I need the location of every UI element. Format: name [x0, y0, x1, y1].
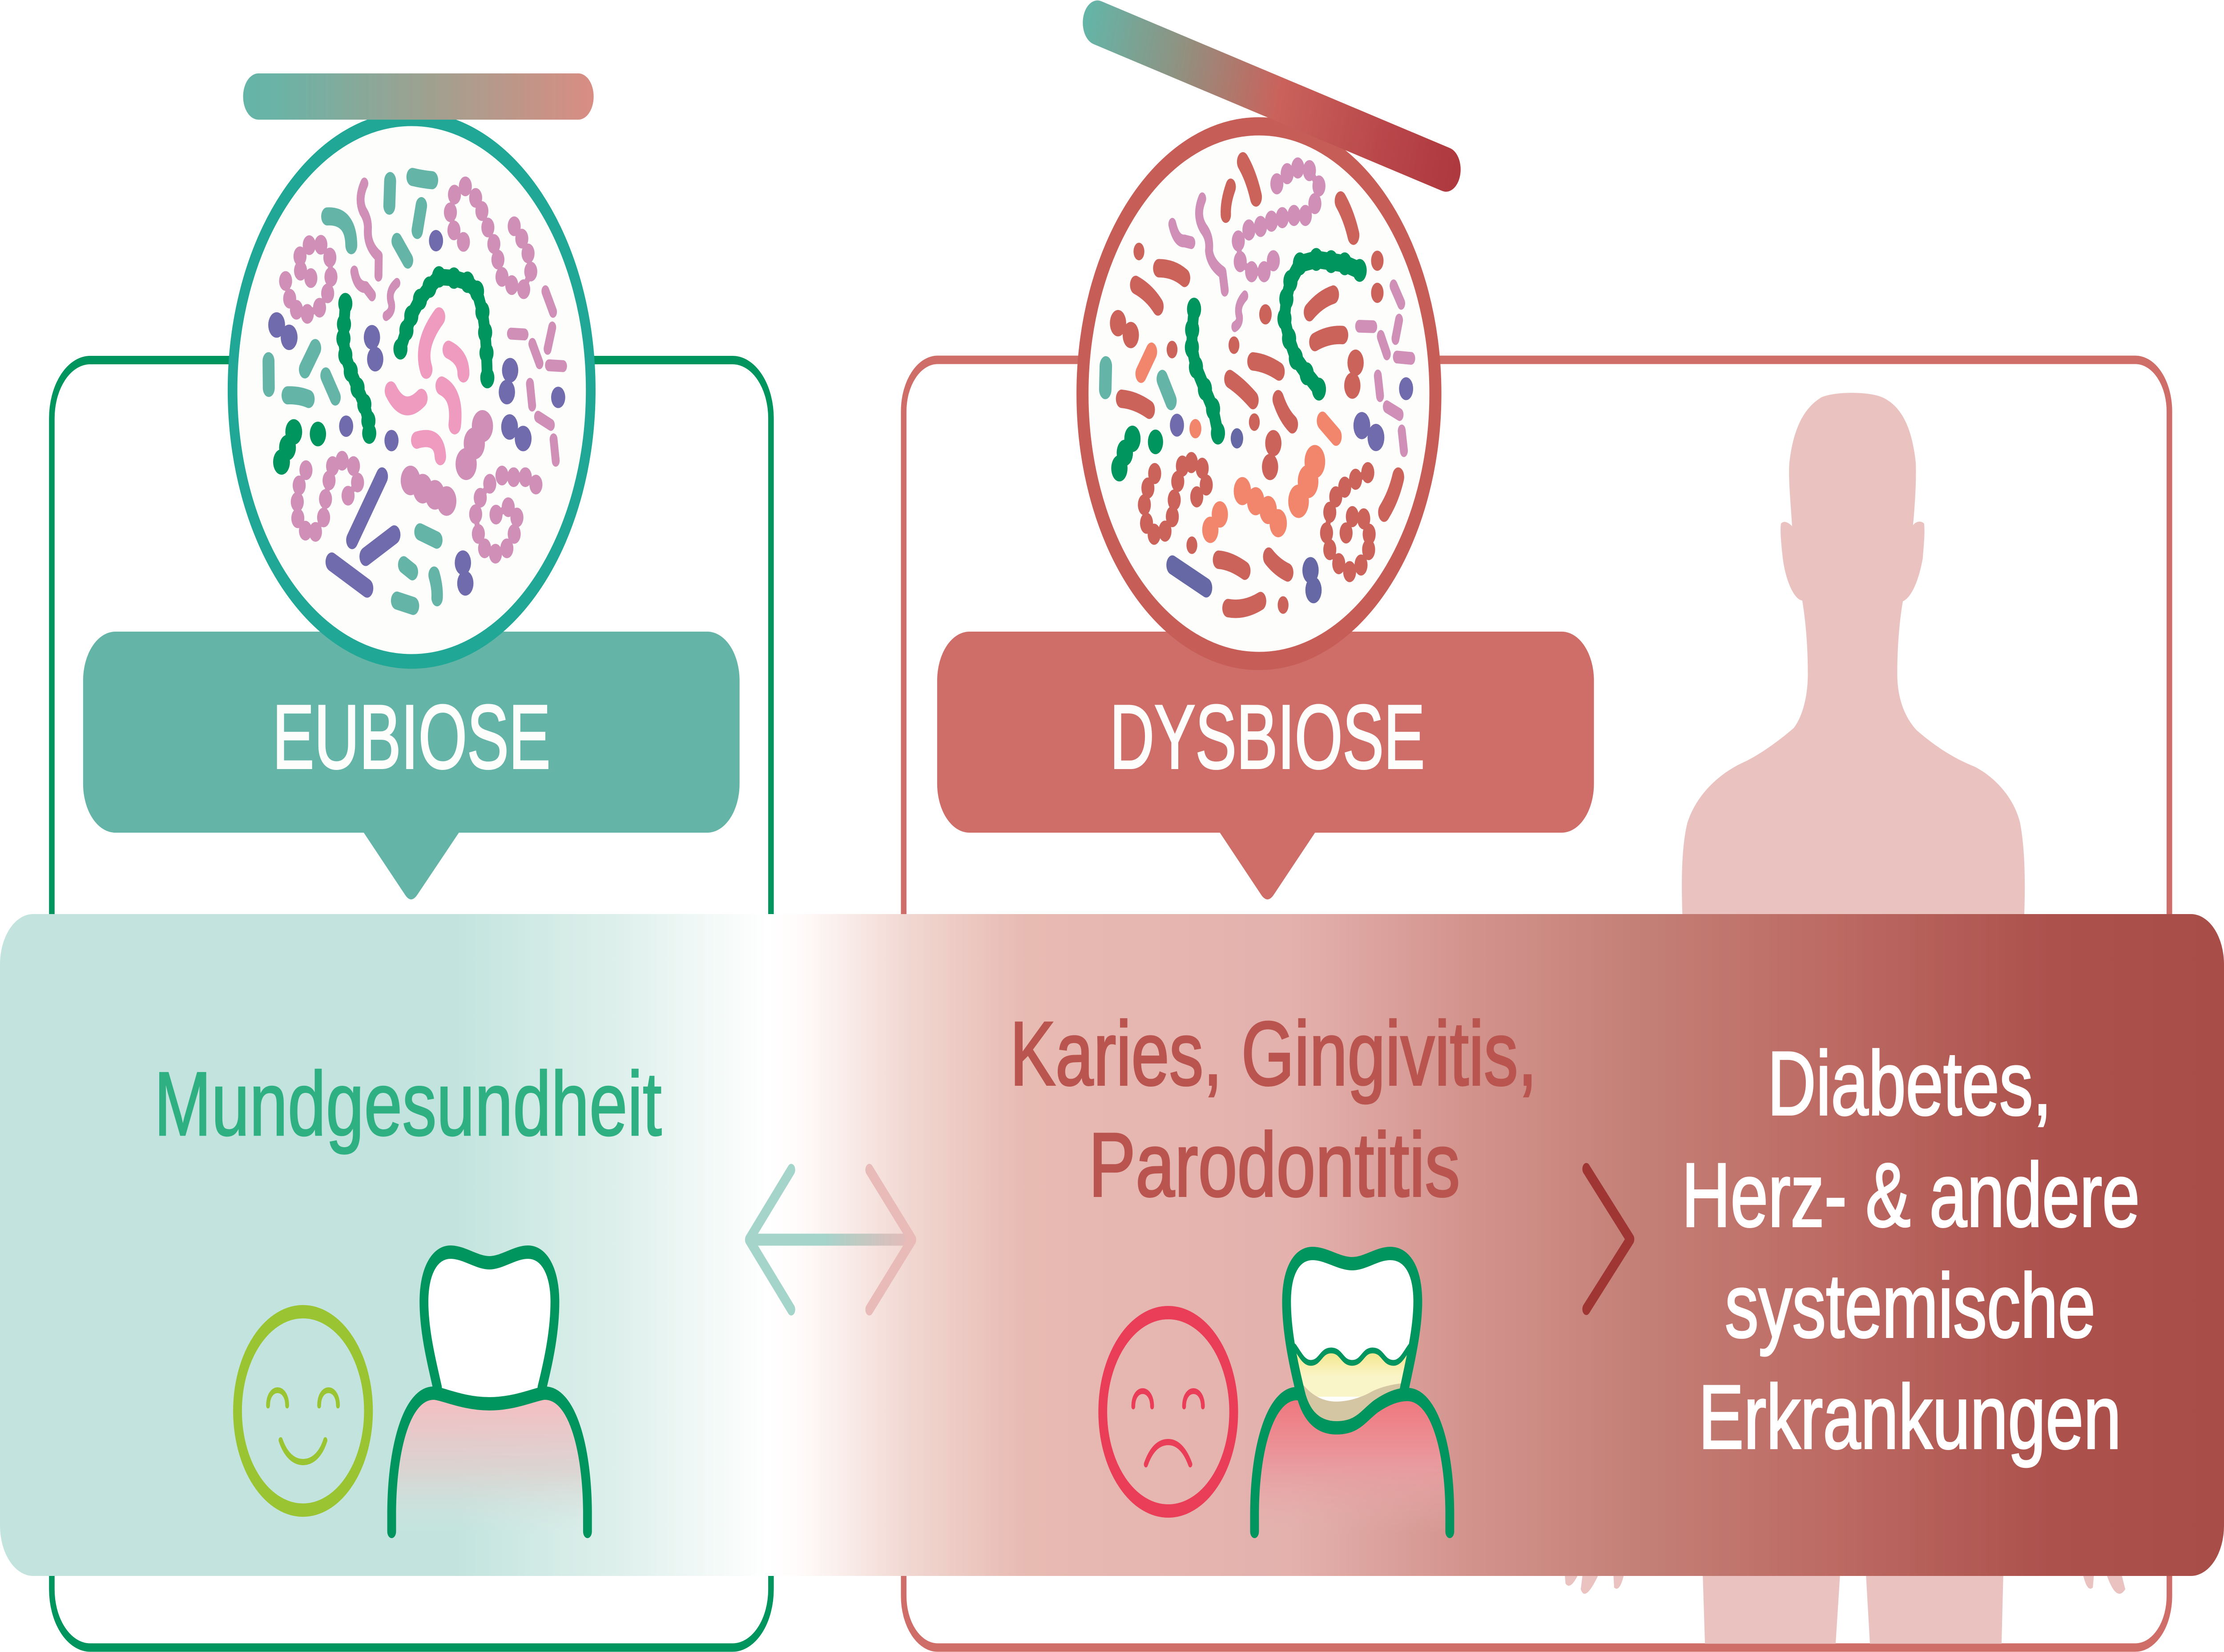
text: systemic diseases — [1682, 1033, 2140, 1468]
text: systemic diseases: Erkrankungen — [1698, 1366, 2121, 1468]
icon: diseased tooth with plaque — [1254, 1253, 1450, 1533]
gradient band — [0, 914, 2224, 1576]
panel frame: dysbiose — [904, 360, 2169, 1648]
icon: happy face — [238, 1312, 368, 1510]
callout: eubiose — [83, 632, 740, 899]
text: systemic diseases: Herz- & andere — [1682, 1144, 2140, 1246]
icon: healthy tooth — [392, 1252, 588, 1533]
text: systemic diseases: Diabetes, — [1768, 1033, 2052, 1134]
microbiome circle: dysbiose — [1083, 126, 1435, 661]
balance bar: level — [258, 73, 578, 120]
arrow: bidirectional — [749, 1170, 912, 1310]
human body silhouette — [1564, 393, 2125, 1644]
panel frame: eubiose — [52, 360, 771, 1648]
bacteria: eubiose — [269, 177, 563, 606]
microbiome circle: eubiose — [233, 119, 591, 661]
arrow: chevron to systemic diseases — [1586, 1169, 1630, 1309]
icon: sad face — [1103, 1313, 1234, 1511]
text: Karies, Gingivitis, Parodontitis: Parodontitis — [1089, 1114, 1460, 1216]
bacteria: dysbiose — [1105, 162, 1411, 609]
text: Karies, Gingivitis, Parodontitis — [1010, 1003, 1537, 1216]
text: systemic diseases: systemische — [1725, 1255, 2095, 1357]
callout: dysbiose — [937, 632, 1594, 899]
heading: EUBIOSE: EUBIOSE — [273, 686, 551, 788]
text: Mundgesundheit: Mundgesundheit — [154, 1053, 662, 1155]
heading: DYSBIOSE: DYSBIOSE — [1110, 686, 1425, 788]
text: Karies, Gingivitis, Parodontitis: Karies, Gingivitis, — [1010, 1003, 1537, 1104]
balance bar: tilted — [1097, 23, 1446, 169]
